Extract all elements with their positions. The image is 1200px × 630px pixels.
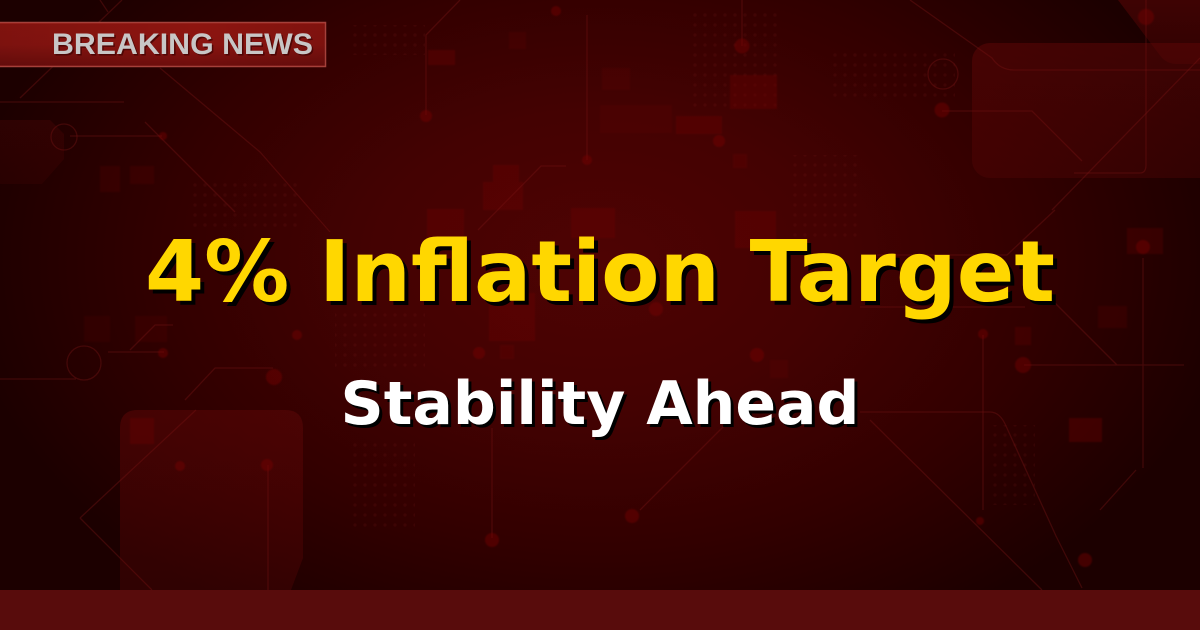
subtitle: Stability Ahead	[340, 369, 860, 439]
small squares	[84, 32, 1163, 444]
breaking news banner: BREAKING NEWS	[52, 28, 313, 61]
title: 4% Inflation Target	[145, 223, 1055, 322]
breaking news banner	[0, 22, 326, 66]
circuit nodes	[158, 6, 1154, 567]
rings	[51, 59, 958, 380]
dot grids	[190, 12, 1035, 530]
breaking news banner: BREAKING NEWS	[54, 30, 314, 62]
footer bar	[0, 590, 1200, 630]
